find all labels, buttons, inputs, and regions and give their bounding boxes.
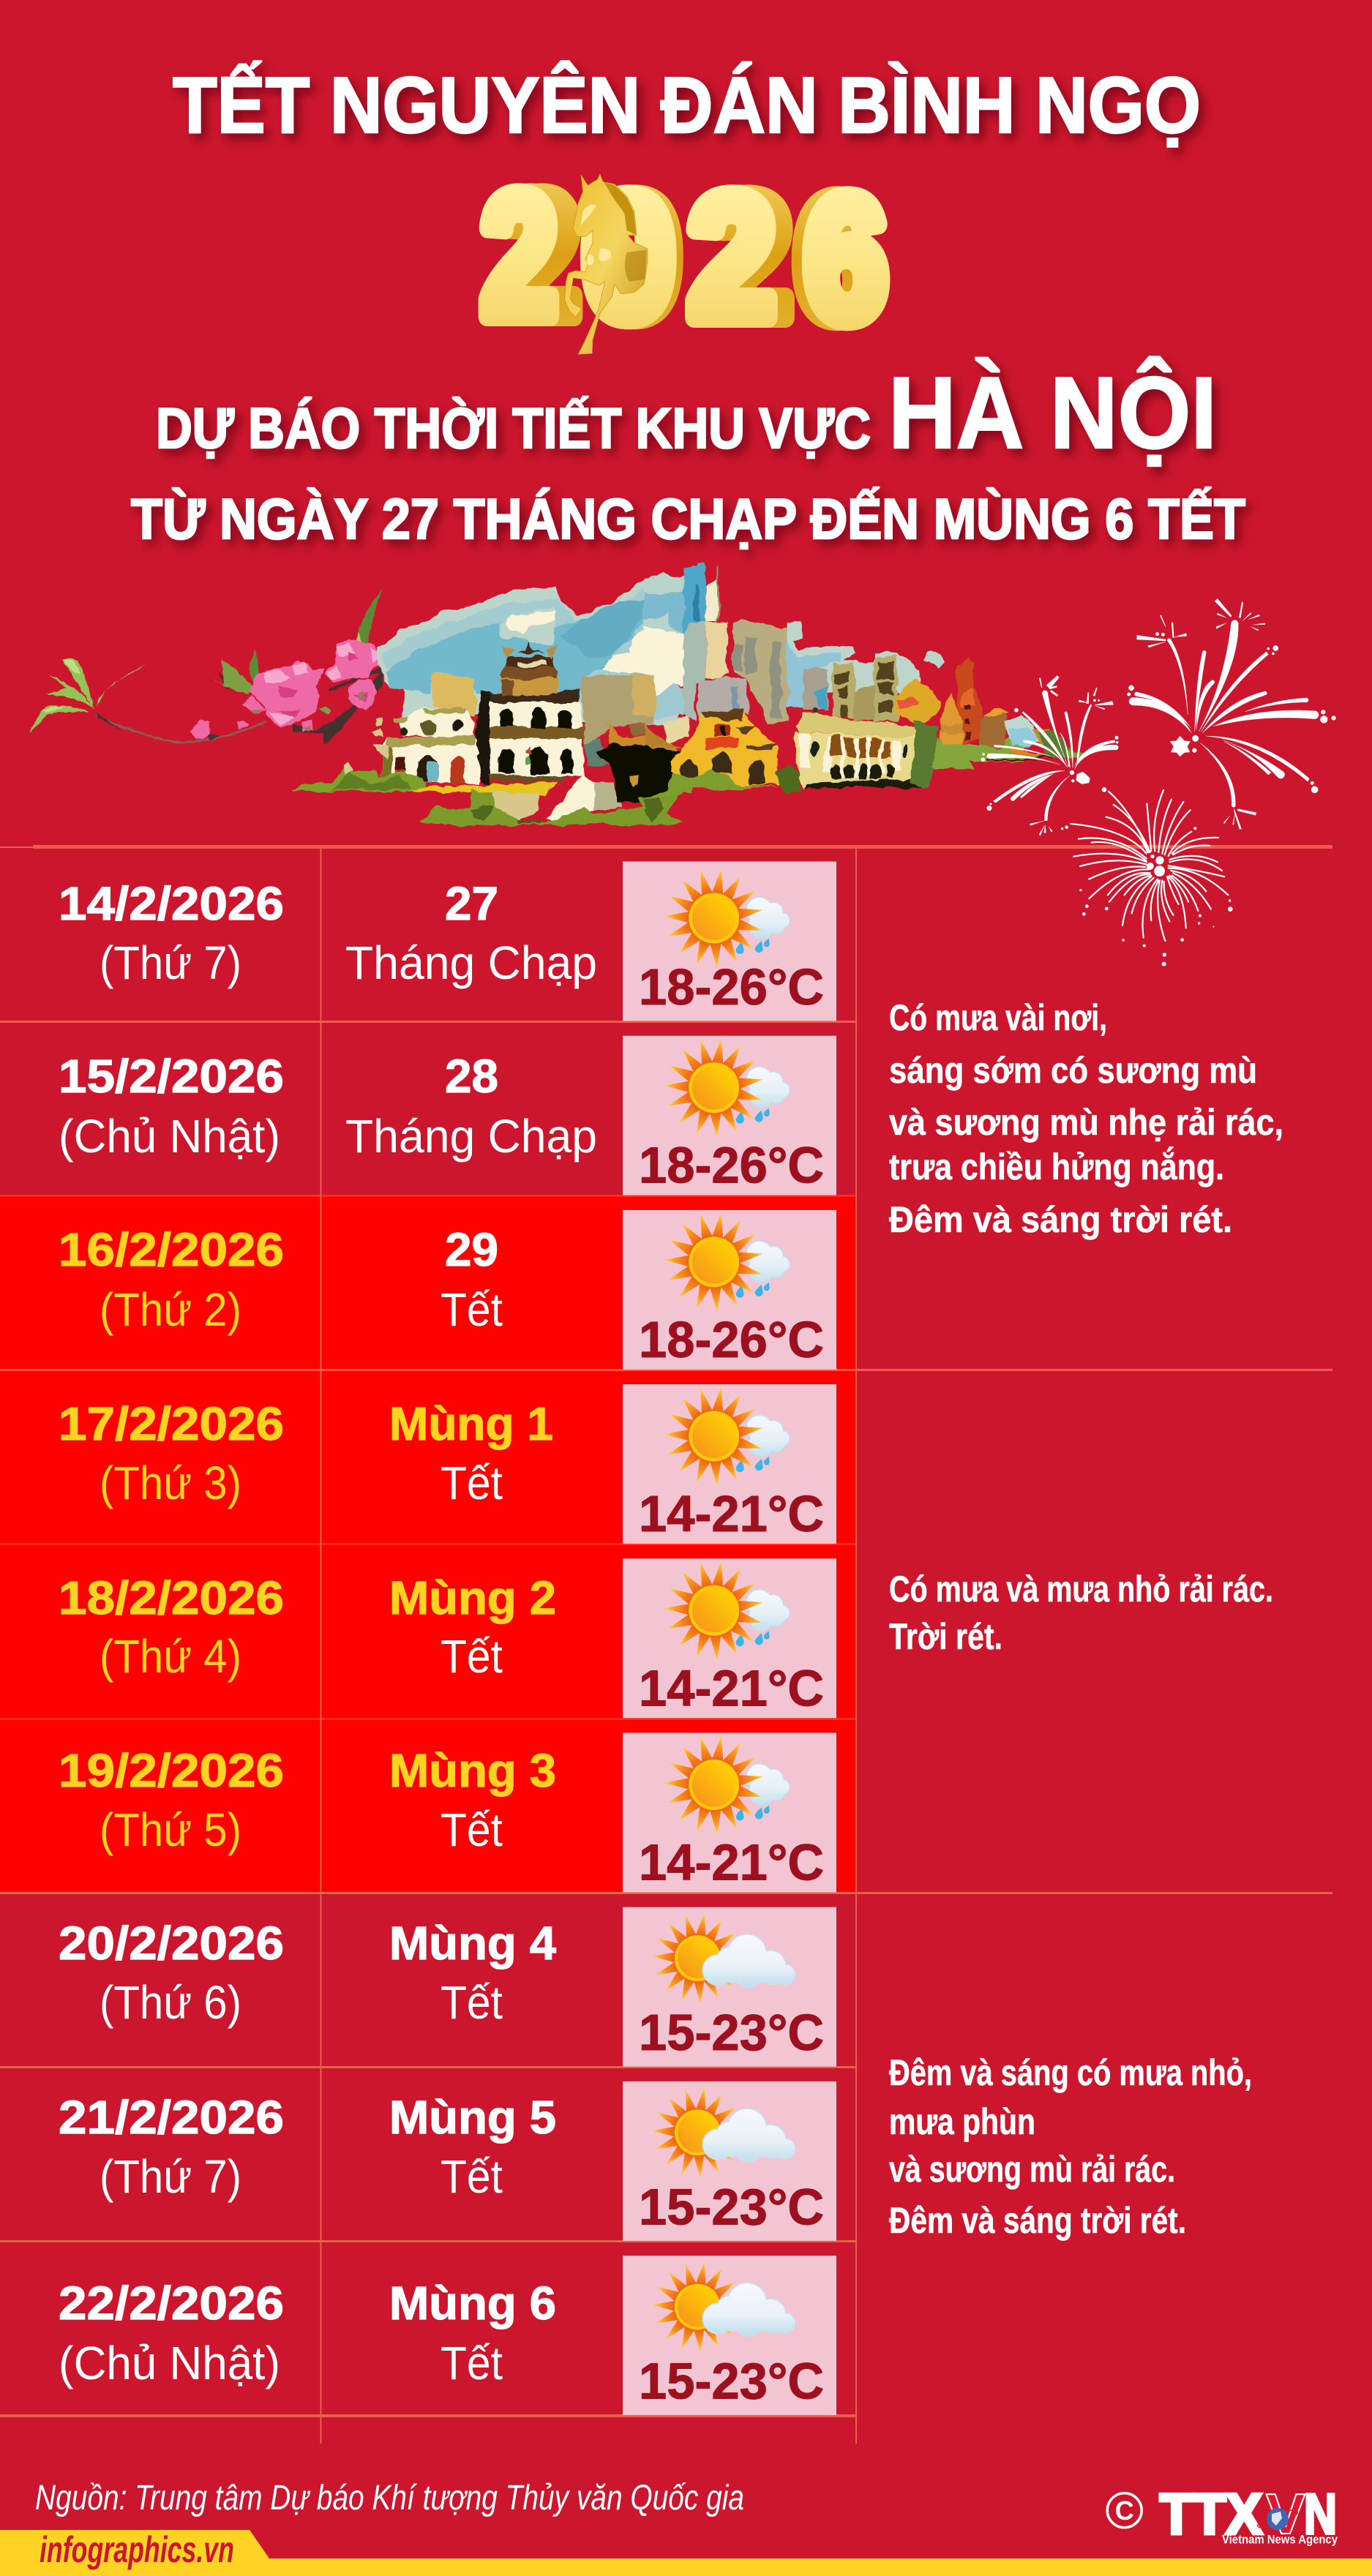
numerals: 2 — [493, 157, 569, 353]
source note: Nguồn: Trung tâm Dự báo Khí tượng Thủy văn Quốc gia — [35, 2479, 744, 2517]
lunar month: Tết — [441, 1976, 503, 2029]
date: 14/2/2026 — [59, 877, 284, 930]
lunar day: Mùng 1 — [389, 1397, 553, 1450]
firework: bottom radial burst — [1061, 787, 1233, 966]
heading: forecast for Ha Noi: DỰ BÁO THỜI TIẾT KHU VỰC — [156, 396, 871, 460]
weekday: (Thứ 3) — [100, 1457, 241, 1509]
weather card — [623, 1907, 836, 2067]
date: 19/2/2026 — [59, 1744, 284, 1797]
firework: right large burst — [1127, 598, 1336, 829]
numerals: 2 — [689, 159, 775, 355]
forecast text: 20 to 22 Feb: mưa phùn — [889, 2101, 1035, 2142]
logo: TTXVN — [1107, 2482, 1338, 2546]
weather card: 14-21°C — [639, 1485, 824, 1542]
date: 20/2/2026 — [59, 1917, 284, 1969]
weather card — [623, 862, 836, 1021]
top divider line — [0, 845, 1332, 849]
lawn — [293, 766, 430, 792]
weekday: (Thứ 4) — [100, 1630, 241, 1683]
pavilion — [606, 722, 678, 751]
date: 21/2/2026 — [59, 2091, 284, 2144]
city: right trees and pagodas — [895, 678, 942, 724]
wordmark: TTX — [1160, 2482, 1262, 2546]
copyright mark — [1107, 2493, 1142, 2528]
weather card: 15-23°C — [639, 2178, 824, 2235]
turtle tower — [476, 690, 492, 785]
lunar month: Tết — [441, 1803, 503, 1856]
forecast text: 14 to 16 Feb: Đêm và sáng trời rét. — [889, 1199, 1232, 1240]
row: 19/2/2026 — [59, 1732, 836, 1892]
heading: forecast for Ha Noi: HÀ NỘI — [888, 356, 1217, 470]
weather card — [623, 1036, 836, 1195]
lunar day: 27 — [445, 877, 498, 930]
forecast text: 17 to 19 Feb — [889, 1569, 1273, 1657]
weather card: 18-26°C — [639, 1137, 824, 1194]
footer band with site name — [0, 2529, 1372, 2576]
weather card: 15-23°C — [639, 2004, 824, 2061]
weekday: (Thứ 7) — [100, 936, 241, 989]
weather card: 14-21°C — [639, 1833, 824, 1890]
gold 2026 numerals with horse — [481, 157, 887, 356]
row: 18/2/2026 — [59, 1558, 836, 1718]
weather card — [623, 2081, 836, 2241]
numerals: 6 — [795, 160, 877, 356]
lunar day: Mùng 2 — [389, 1571, 556, 1624]
lunar day: Mùng 3 — [389, 1744, 556, 1797]
weekday: (Chủ Nhật) — [59, 1110, 280, 1163]
heading: forecast for Ha Noi — [156, 356, 1217, 470]
lunar month: Tết — [441, 1630, 503, 1683]
numerals: 0 — [590, 159, 681, 355]
row: 22/2/2026 — [59, 2256, 836, 2415]
city: lawn — [644, 770, 778, 800]
weekday: (Chủ Nhật) — [59, 2337, 280, 2389]
weekday: (Thứ 7) — [100, 2150, 241, 2203]
globe — [1256, 2507, 1300, 2531]
subheading: date range: TỪ NGÀY 27 THÁNG CHẠP ĐẾN MÙNG 6 TẾT — [131, 487, 1245, 551]
date: 17/2/2026 — [59, 1397, 284, 1450]
forecast text: 17 to 19 Feb: Có mưa và mưa nhỏ rải rác. — [889, 1569, 1273, 1610]
city: left half with Turtle Tower — [293, 572, 678, 825]
weather card — [623, 1558, 836, 1718]
forecast text: 20 to 22 Feb: Đêm và sáng trời rét. — [889, 2200, 1186, 2241]
lunar month: Tết — [441, 1283, 503, 1336]
row: 17/2/2026 — [59, 1384, 836, 1544]
logo: TTXVN: N — [1304, 2482, 1337, 2546]
numerals — [481, 157, 887, 356]
date: 18/2/2026 — [59, 1571, 284, 1624]
weather card — [623, 1384, 836, 1544]
city: opera house — [795, 712, 916, 737]
lunar day: Mùng 4 — [389, 1917, 556, 1969]
tagline: Vietnam News Agency — [1222, 2533, 1338, 2546]
forecast text: 14 to 16 Feb: sáng sớm có sương mù — [889, 1050, 1257, 1091]
date: 16/2/2026 — [59, 1223, 284, 1276]
numerals: 2 — [505, 157, 580, 353]
copyright mark: C — [1115, 2496, 1134, 2526]
lunar month: Tết — [441, 1457, 503, 1509]
weather card: 18-26°C — [639, 958, 824, 1015]
weather card — [623, 2256, 836, 2415]
weather card: 15-23°C — [639, 2353, 824, 2410]
numerals: 6 — [805, 160, 887, 356]
row: 21/2/2026 — [59, 2081, 836, 2241]
lunar month: Tháng Chạp — [345, 936, 597, 989]
forecast text: 20 to 22 Feb: Đêm và sáng có mưa nhỏ, — [889, 2052, 1252, 2093]
row: 20/2/2026 — [59, 1907, 836, 2067]
date: 15/2/2026 — [59, 1050, 284, 1103]
weekday: (Thứ 2) — [100, 1283, 241, 1336]
weather card: 14-21°C — [639, 1659, 824, 1716]
highlight band: Tet days — [0, 1195, 856, 1893]
logo: TTXVN: V — [1266, 2482, 1305, 2546]
row: 14/2/2026 — [59, 862, 836, 1021]
lunar day: Mùng 5 — [389, 2091, 556, 2144]
numerals: 0 — [583, 159, 674, 355]
forecast text: 14 to 16 Feb: Có mưa vài nơi, — [889, 997, 1107, 1038]
illustration: Hanoi cityscape — [293, 562, 1085, 825]
forecast text: 14 to 16 Feb — [889, 997, 1283, 1240]
forecast text: 20 to 22 Feb — [889, 2052, 1252, 2241]
title: Tet Nguyen Dan Binh Ngo: TẾT NGUYÊN ĐÁN BÌNH NGỌ — [173, 61, 1201, 150]
forecast text: 14 to 16 Feb: trưa chiều hửng nắng. — [889, 1146, 1224, 1187]
lunar day: Mùng 6 — [389, 2277, 556, 2329]
lunar day: 28 — [445, 1050, 498, 1103]
lunar month: Tháng Chạp — [345, 1110, 597, 1163]
row: 16/2/2026 — [59, 1210, 836, 1370]
lunar month: Tết — [441, 2337, 503, 2389]
city: right half with towers and opera house — [644, 562, 1024, 825]
weather card: 18-26°C — [639, 1311, 824, 1368]
illustration: peach blossom branch — [29, 589, 383, 745]
city: yellow temple gate — [671, 712, 779, 785]
forecast text: 17 to 19 Feb: Trời rét. — [889, 1616, 1002, 1657]
numerals: 2 — [697, 159, 783, 355]
icon: golden horse — [565, 174, 648, 354]
row: 15/2/2026 — [59, 1036, 836, 1195]
date: 22/2/2026 — [59, 2277, 284, 2329]
weekday: (Thứ 6) — [100, 1976, 241, 2029]
city: cathedral towers — [832, 656, 899, 722]
weather card — [623, 1732, 836, 1892]
firework: left small burst — [981, 675, 1118, 835]
numerals: 2 — [705, 159, 792, 355]
weather card — [623, 1210, 836, 1370]
numerals: 2 — [481, 157, 557, 353]
forecast text: 20 to 22 Feb: và sương mù rải rác. — [889, 2149, 1175, 2190]
lunar day: 29 — [445, 1223, 498, 1276]
city: far right tail — [981, 715, 1085, 762]
lunar month: Tết — [441, 2150, 503, 2203]
table grid lines — [0, 847, 1332, 2444]
site name: infographics.vn — [40, 2529, 234, 2570]
weekday: (Thứ 5) — [100, 1803, 241, 1856]
forecast text: 14 to 16 Feb: và sương mù nhẹ rải rác, — [889, 1102, 1283, 1143]
